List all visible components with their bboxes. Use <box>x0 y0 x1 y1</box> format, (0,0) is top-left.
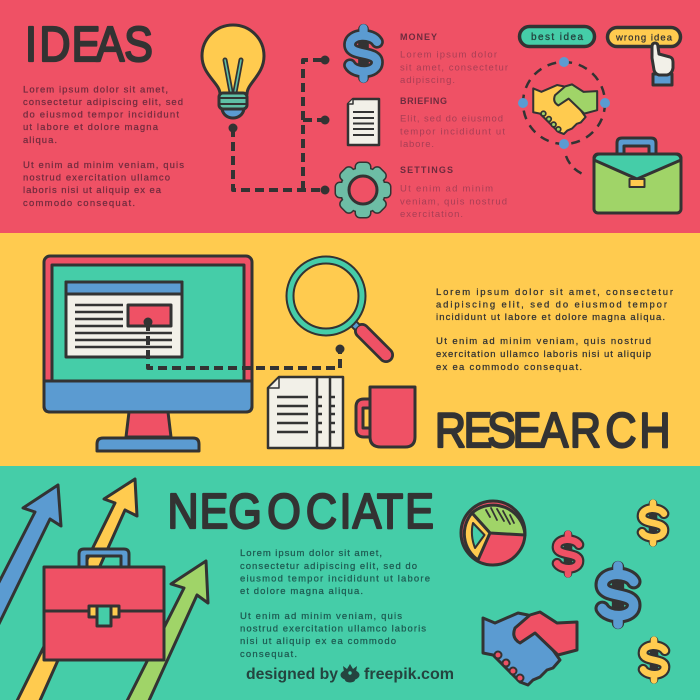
text block: settings <box>400 165 507 220</box>
text block: money: Lorem ipsum dolor <box>400 50 497 60</box>
heading: ideas: IDEAS <box>25 16 153 72</box>
text block: research intro: ex ea commodo consequat. <box>436 362 582 373</box>
text block: ideas intro: Lorem ipsum dolor sit amet, <box>23 84 168 96</box>
icon: yellow dollar bottom <box>643 640 665 680</box>
button: best idea: best idea <box>531 32 583 43</box>
text block: negociate intro: Lorem ipsum dolor sit amet, <box>240 548 382 559</box>
text block: negociate intro: et dolore magna aliqua. <box>240 586 363 597</box>
text block: money <box>400 32 508 86</box>
button: wrong idea: wrong idea <box>615 32 673 44</box>
icon: yellow dollar top <box>642 503 664 543</box>
credit: freepik: freepik.com <box>364 666 454 683</box>
text block: ideas intro: ut labore et dolore magna <box>23 122 159 133</box>
icon: blue arrow <box>0 485 61 632</box>
text block: briefing: Elit, sed do eiusmod <box>400 114 503 124</box>
text block: ideas intro: nostrud exercitation ullamco <box>23 172 170 184</box>
icon: papers <box>268 377 343 448</box>
icon: blue and red handshake <box>483 612 577 685</box>
icon: yellow arrow <box>15 479 137 700</box>
text block: research intro: Lorem ipsum dolor sit amet, consectetur <box>436 287 673 298</box>
icon: red dollar <box>557 534 579 574</box>
text block: negociate intro: consectetur adipiscing elit, sed do <box>240 561 417 572</box>
icon: magnifying glass <box>290 260 386 355</box>
text block: ideas intro: do eiusmod tempor incididunt <box>23 110 179 120</box>
text block: settings: SETTINGS <box>400 165 453 175</box>
icon: gear <box>336 163 390 217</box>
chart: pie <box>461 501 525 565</box>
text block: settings: veniam, quis nostrud <box>400 196 507 208</box>
icon: pointing hand <box>652 43 673 85</box>
text block: ideas intro: consectetur adipiscing elit, sed <box>23 97 183 108</box>
panel: research <box>0 233 700 466</box>
text block: negociate intro: nisi ut aliquip ex ea commodo <box>240 636 396 647</box>
text block: ideas intro: laboris nisi ut aliquip ex ea <box>23 185 162 196</box>
panel: negociate <box>0 466 700 700</box>
text block: money: sit amet, consectetur <box>400 62 508 74</box>
icon: green briefcase <box>594 138 681 213</box>
credit: freepik: designed by <box>246 666 338 683</box>
icon: blue dollar large <box>602 566 634 624</box>
credit: freepik <box>246 664 454 683</box>
icon: mug <box>356 387 415 447</box>
text block: research intro: Ut enim ad minim veniam, quis nostrud <box>436 336 651 347</box>
connector: dashed tree <box>228 56 330 194</box>
text block: negociate intro: consequat. <box>240 649 297 660</box>
icon: freepik logo <box>340 664 360 682</box>
button: wrong idea <box>608 28 680 46</box>
icon: light bulb <box>202 25 264 118</box>
text block: research intro: incididunt ut labore et dolore magna aliqua. <box>436 312 665 323</box>
text block: negociate intro: Ut enim ad minim veniam, quis <box>240 611 402 622</box>
text block: negociate intro: eiusmod tempor incididunt ut labore <box>240 574 430 584</box>
panel: ideas <box>0 0 700 233</box>
text block: settings: exercitation. <box>400 209 463 220</box>
text block: settings: Ut enim ad minim <box>400 184 493 194</box>
text block: ideas intro: commodo consequat. <box>23 198 135 209</box>
text block: briefing: labore. <box>400 139 434 150</box>
button: best idea <box>520 26 594 46</box>
text block: research intro: exercitation ullamco laboris nisi ut aliquip <box>436 349 651 360</box>
text block: ideas intro: aliqua. <box>23 135 57 146</box>
icon: blue dollar <box>350 28 377 79</box>
text block: negociate intro <box>240 548 430 660</box>
connector: dashed line <box>144 318 344 368</box>
text block: money: MONEY <box>400 32 437 42</box>
text block: briefing <box>400 96 505 150</box>
text block: research intro: adipiscing elit, sed do eiusmod tempor <box>436 300 667 310</box>
text block: research intro <box>436 287 673 373</box>
icon: yellow and green handshake <box>533 84 597 134</box>
text block: negociate intro: nostrud exercitation ullamco laboris <box>240 624 426 634</box>
icon: computer monitor <box>44 256 252 451</box>
heading: research: RESEARCH <box>435 402 671 458</box>
text block: briefing: tempor incididunt ut <box>400 126 505 138</box>
text block: money: adipiscing. <box>400 75 455 86</box>
icon: red briefcase <box>44 549 164 660</box>
icon: dashed circle <box>518 57 610 176</box>
browser window <box>66 282 182 357</box>
icon: document <box>348 99 379 145</box>
icon: green arrow <box>125 561 208 700</box>
text block: briefing: BRIEFING <box>400 96 447 106</box>
text block: ideas intro <box>23 84 184 209</box>
heading: negociate: NEGOCIATE <box>167 483 434 539</box>
text block: ideas intro: Ut enim ad minim veniam, quis <box>23 160 184 171</box>
